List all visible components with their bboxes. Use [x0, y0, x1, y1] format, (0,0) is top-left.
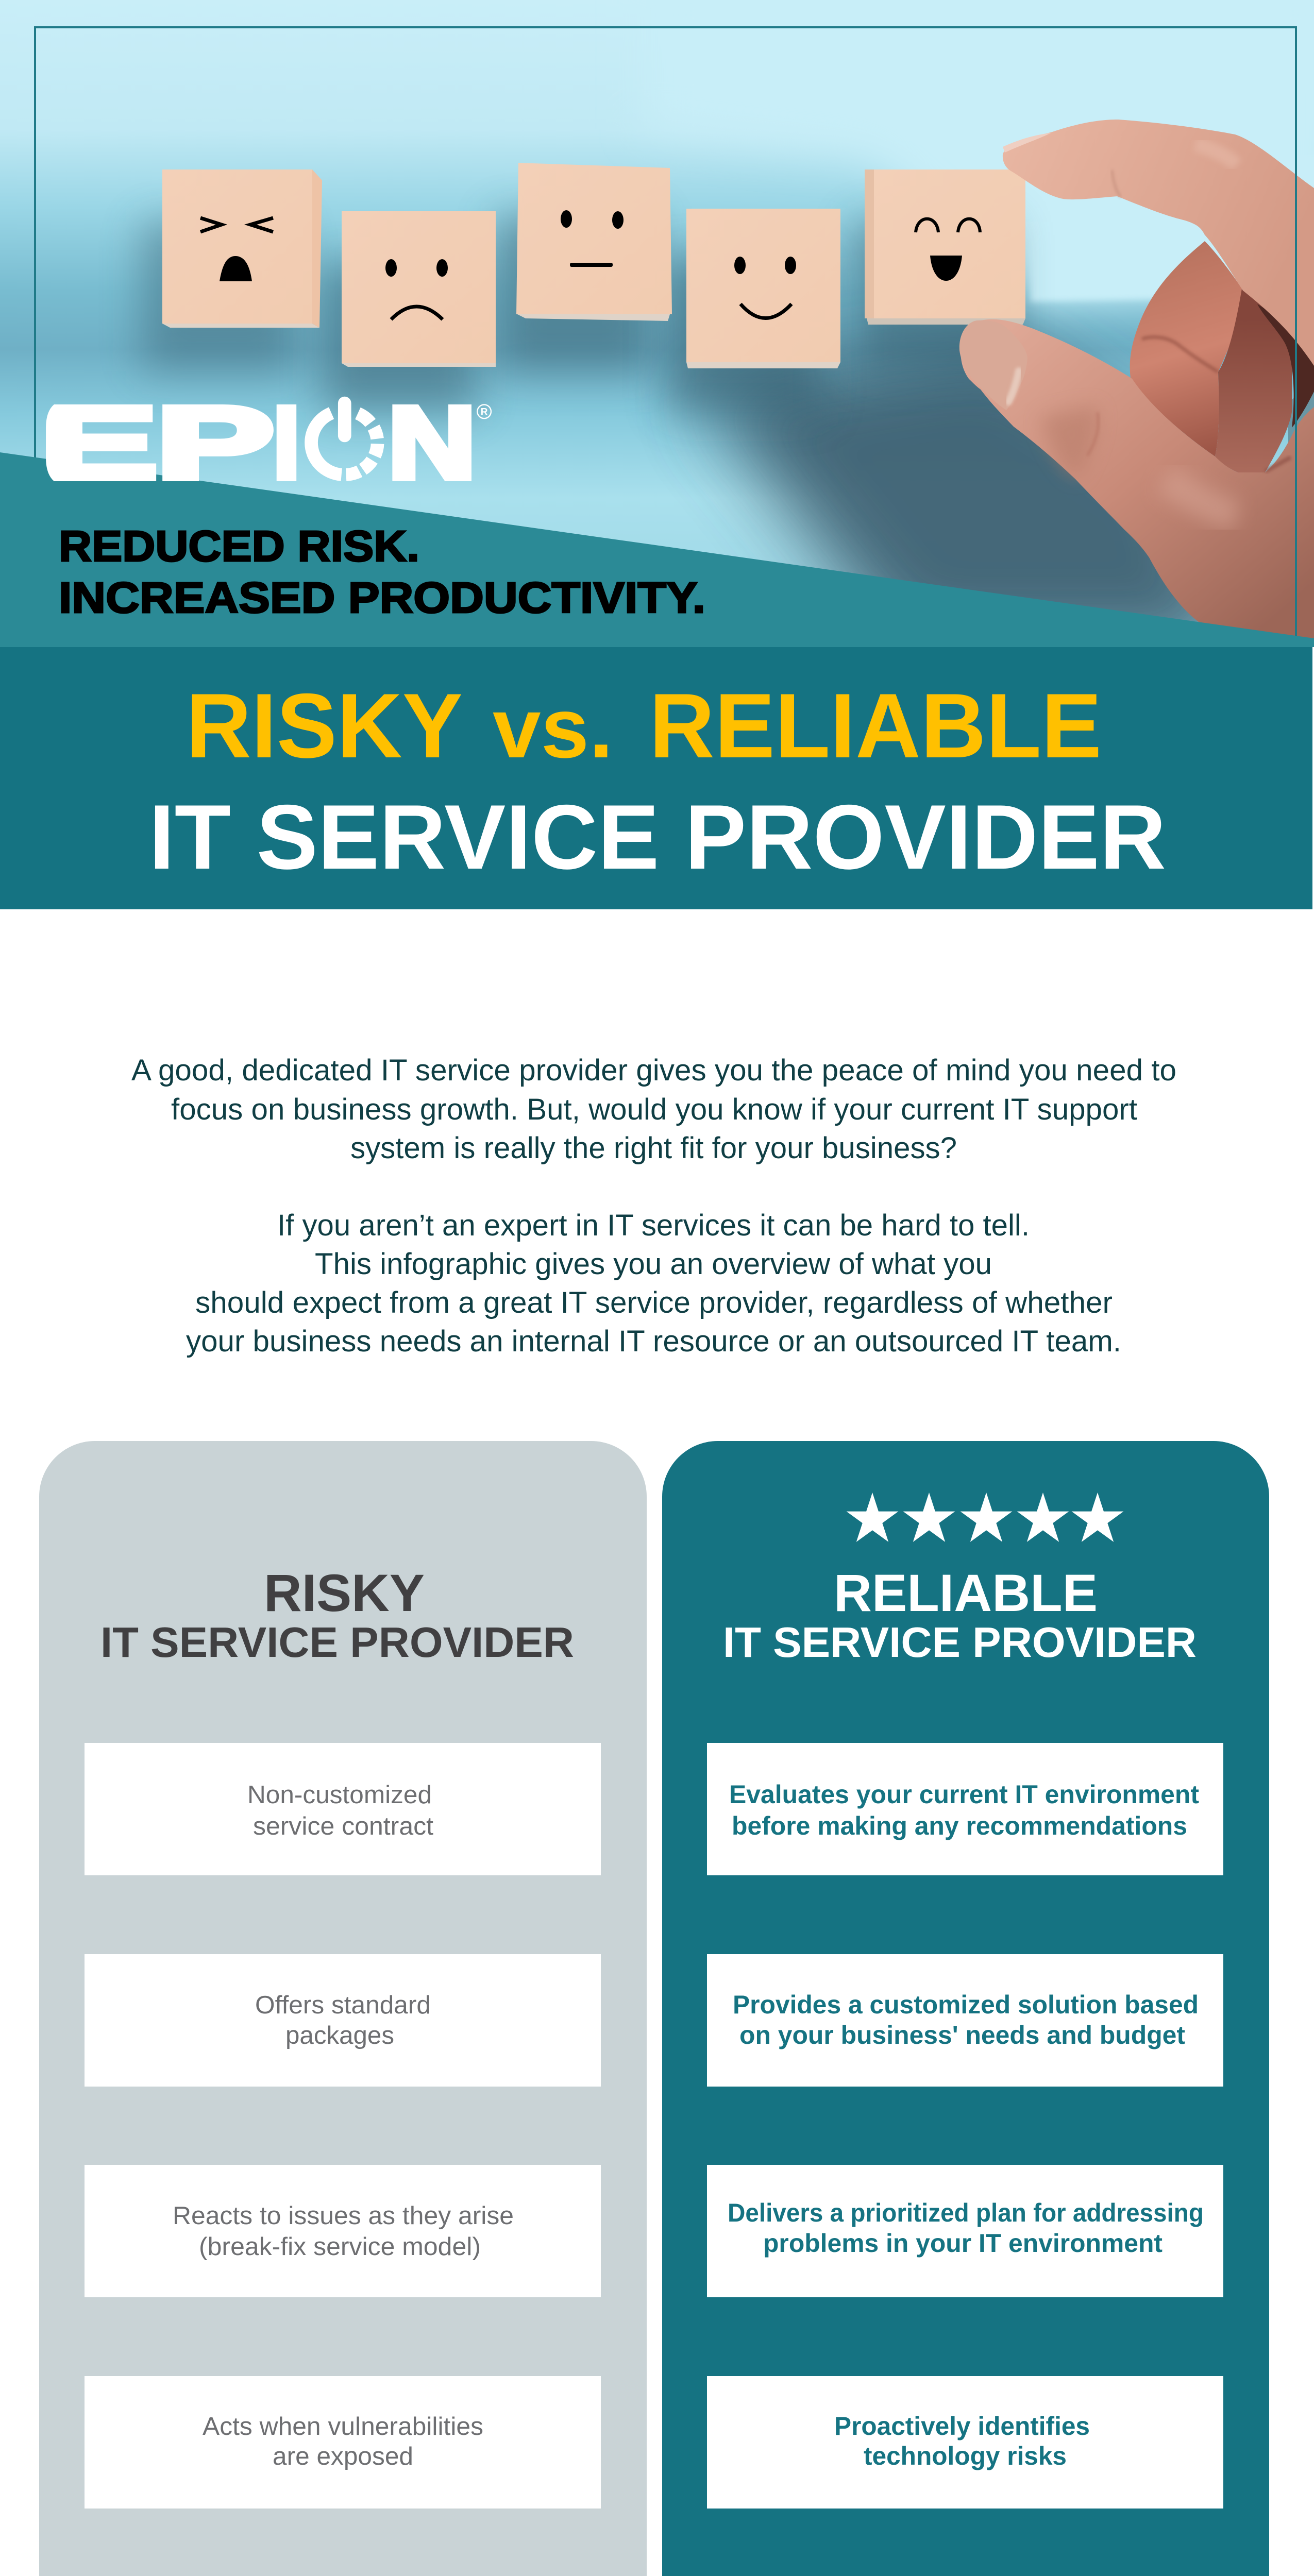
title: risky vs reliable: vs.	[493, 681, 613, 775]
intro text: system is really the right fit for your business?	[350, 1131, 957, 1165]
intro text: focus on business growth. But, would you know if your current IT support	[171, 1093, 1137, 1126]
intro text: should expect from a great IT service provider, regardless of whether	[195, 1286, 1113, 1319]
logo: EPION white: R	[481, 406, 488, 417]
tagline: REDUCED RISK.	[59, 522, 419, 570]
item: non-customized contract	[85, 1743, 601, 1875]
thin frame line	[35, 27, 1296, 646]
intro text: If you aren’t an expert in IT services it can be hard to tell.	[277, 1209, 1030, 1242]
item: acts when exposed: Acts when vulnerabilities	[203, 2413, 483, 2441]
item: non-customized contract: service contract	[253, 1812, 433, 1840]
title band	[0, 647, 1312, 909]
logo: EPION white	[40, 386, 491, 500]
item: standard packages	[85, 1954, 601, 2087]
logo: EPION white: E	[40, 386, 158, 500]
wooden block: neutral face	[516, 163, 672, 321]
item: evaluates environment: before making any recommendations	[732, 1811, 1187, 1840]
title: risky vs reliable: RELIABLE	[649, 674, 1102, 777]
item: customized solution: Provides a customized solution based	[733, 1990, 1199, 2019]
item: proactive risk identification: Proactively identifies	[834, 2412, 1090, 2441]
item: customized solution	[707, 1954, 1223, 2087]
heading: risky: IT SERVICE PROVIDER	[100, 1618, 574, 1666]
item: prioritized plan: Delivers a prioritized plan for addressing	[728, 2198, 1204, 2227]
intro text: your business needs an internal IT resource or an outsourced IT team.	[186, 1325, 1121, 1358]
item: proactive risk identification: technology risks	[864, 2442, 1067, 2470]
intro text: A good, dedicated IT service provider gives you the peace of mind you need to	[131, 1054, 1176, 1087]
title: IT service provider: IT SERVICE PROVIDER	[149, 786, 1166, 888]
title: risky vs reliable	[186, 674, 1102, 777]
heading: reliable: IT SERVICE PROVIDER	[723, 1618, 1197, 1666]
item: reacts to issues	[85, 2165, 601, 2297]
icon: five white stars	[847, 1493, 1123, 1542]
logo: EPION white: N	[388, 386, 476, 500]
item: acts when exposed	[85, 2376, 601, 2509]
intro text	[131, 1054, 1176, 1358]
wooden block: smiling face	[686, 209, 840, 368]
item: non-customized contract: Non-customized	[247, 1781, 432, 1809]
item: standard packages: Offers standard	[255, 1991, 431, 2019]
item: acts when exposed: are exposed	[273, 2443, 413, 2470]
teal diagonal wedge	[0, 452, 1314, 647]
hand holding block	[959, 120, 1314, 641]
item: reacts to issues: Reacts to issues as they arise	[173, 2202, 514, 2230]
heading: risky	[100, 1564, 574, 1666]
heading: risky: RISKY	[264, 1564, 425, 1622]
title: risky vs reliable: RISKY	[186, 674, 463, 777]
logo: EPION white: P	[156, 386, 274, 500]
item: proactive risk identification	[707, 2376, 1223, 2509]
logo: EPION white: I	[273, 386, 300, 500]
panel: risky provider	[39, 1441, 647, 2576]
heading: reliable	[723, 1564, 1197, 1666]
item: standard packages: packages	[285, 2022, 394, 2049]
hero photo banner	[0, 0, 1314, 649]
panel: reliable provider	[662, 1441, 1269, 2576]
item: prioritized plan	[707, 2165, 1223, 2297]
item: reacts to issues: (break-fix service model)	[199, 2233, 481, 2261]
item: evaluates environment: Evaluates your current IT environment	[729, 1780, 1199, 1809]
wooden block: laughing face	[865, 170, 1025, 325]
heading: reliable: RELIABLE	[834, 1564, 1098, 1622]
tagline: INCREASED PRODUCTIVITY.	[59, 573, 705, 622]
item: evaluates environment	[707, 1743, 1223, 1875]
tagline	[59, 522, 705, 622]
item: customized solution: on your business' needs and budget	[739, 2021, 1185, 2049]
wooden block: crying face	[162, 170, 322, 328]
intro text: This infographic gives you an overview of what you	[315, 1247, 992, 1281]
item: prioritized plan: problems in your IT environment	[763, 2229, 1163, 2258]
wooden block: sad face	[342, 211, 496, 367]
